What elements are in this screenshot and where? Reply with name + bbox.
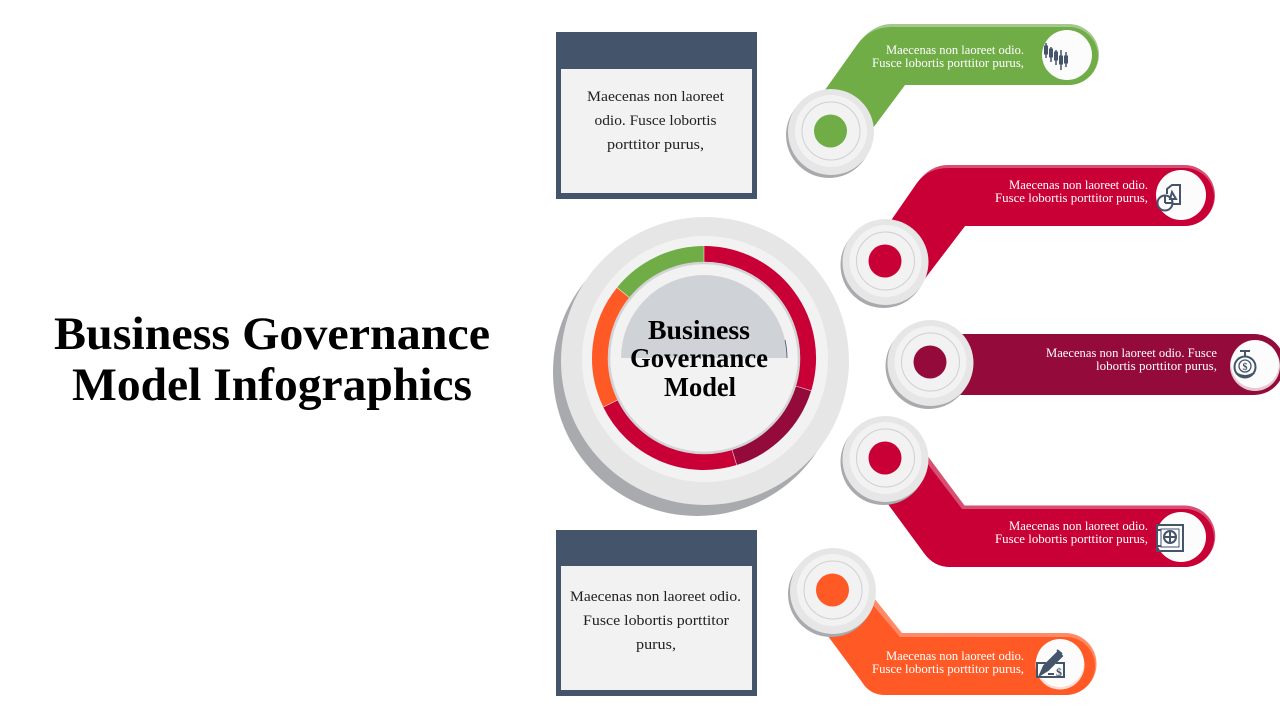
icon: safe	[1156, 512, 1206, 562]
connector band	[885, 447, 1215, 567]
donut segment: red bottom	[610, 404, 734, 462]
icon: document with pie chart	[1156, 170, 1206, 220]
band text: lobortis porttitor purus,	[1096, 359, 1217, 373]
icon: money flask: $	[1242, 362, 1248, 373]
connector band	[825, 24, 1099, 132]
band text: Fusce lobortis porttitor purus,	[872, 662, 1024, 676]
icon: pen and cheque: $	[1056, 665, 1062, 679]
band text: Fusce lobortis porttitor purus,	[995, 191, 1148, 205]
donut segment: green	[623, 254, 704, 293]
band text	[995, 519, 1148, 546]
center label	[630, 315, 768, 402]
title: Business Governance	[54, 308, 490, 360]
title: Model Infographics	[72, 359, 472, 411]
icon: candlestick chart	[1042, 30, 1092, 80]
branch: green	[786, 24, 1099, 178]
band text: Maecenas non laoreet odio.	[886, 43, 1024, 57]
donut segment: orange	[600, 293, 623, 404]
panel: bottom text card: Fusce lobortis porttitor	[583, 613, 729, 629]
icon: money flask	[1230, 340, 1280, 391]
band text	[995, 178, 1148, 205]
node disc	[788, 548, 876, 637]
center label: Model	[664, 372, 736, 402]
donut segment: dark red	[734, 388, 804, 457]
panel: top text card	[556, 32, 757, 199]
connector band	[950, 334, 1280, 395]
panel: bottom text card: purus,	[636, 637, 676, 653]
connector band	[890, 165, 1215, 285]
central donut diagram	[553, 217, 849, 516]
icon: pen and cheque	[1036, 639, 1084, 690]
panel: top text card: porttitor purus,	[607, 137, 704, 153]
band text	[872, 43, 1024, 70]
band text	[1046, 346, 1217, 373]
donut segment: red upper right	[704, 254, 808, 388]
node disc	[886, 320, 974, 409]
node disc	[786, 89, 874, 178]
branch: dark red	[886, 320, 1280, 409]
center label: Governance	[630, 343, 768, 373]
center label: Business	[648, 315, 750, 345]
connector band	[825, 593, 1096, 695]
band text: Maecenas non laoreet odio.	[1009, 519, 1148, 533]
node disc	[840, 219, 928, 308]
node disc	[840, 416, 928, 505]
title	[54, 308, 490, 411]
panel: top text card: odio. Fusce lobortis	[594, 113, 717, 129]
band text: Maecenas non laoreet odio.	[1009, 178, 1148, 192]
branch: orange	[788, 548, 1096, 695]
band text: Fusce lobortis porttitor purus,	[995, 532, 1148, 546]
branch: red upper	[840, 165, 1215, 308]
band text: Maecenas non laoreet odio. Fusce	[1046, 346, 1217, 360]
panel: bottom text card: Maecenas non laoreet odio.	[570, 589, 741, 605]
band text: Fusce lobortis porttitor purus,	[872, 56, 1024, 70]
panel: bottom text card	[556, 530, 757, 696]
band text	[872, 649, 1024, 676]
branch: red lower	[840, 416, 1215, 567]
band text: Maecenas non laoreet odio.	[886, 649, 1024, 663]
panel: top text card: Maecenas non laoreet	[587, 89, 725, 105]
